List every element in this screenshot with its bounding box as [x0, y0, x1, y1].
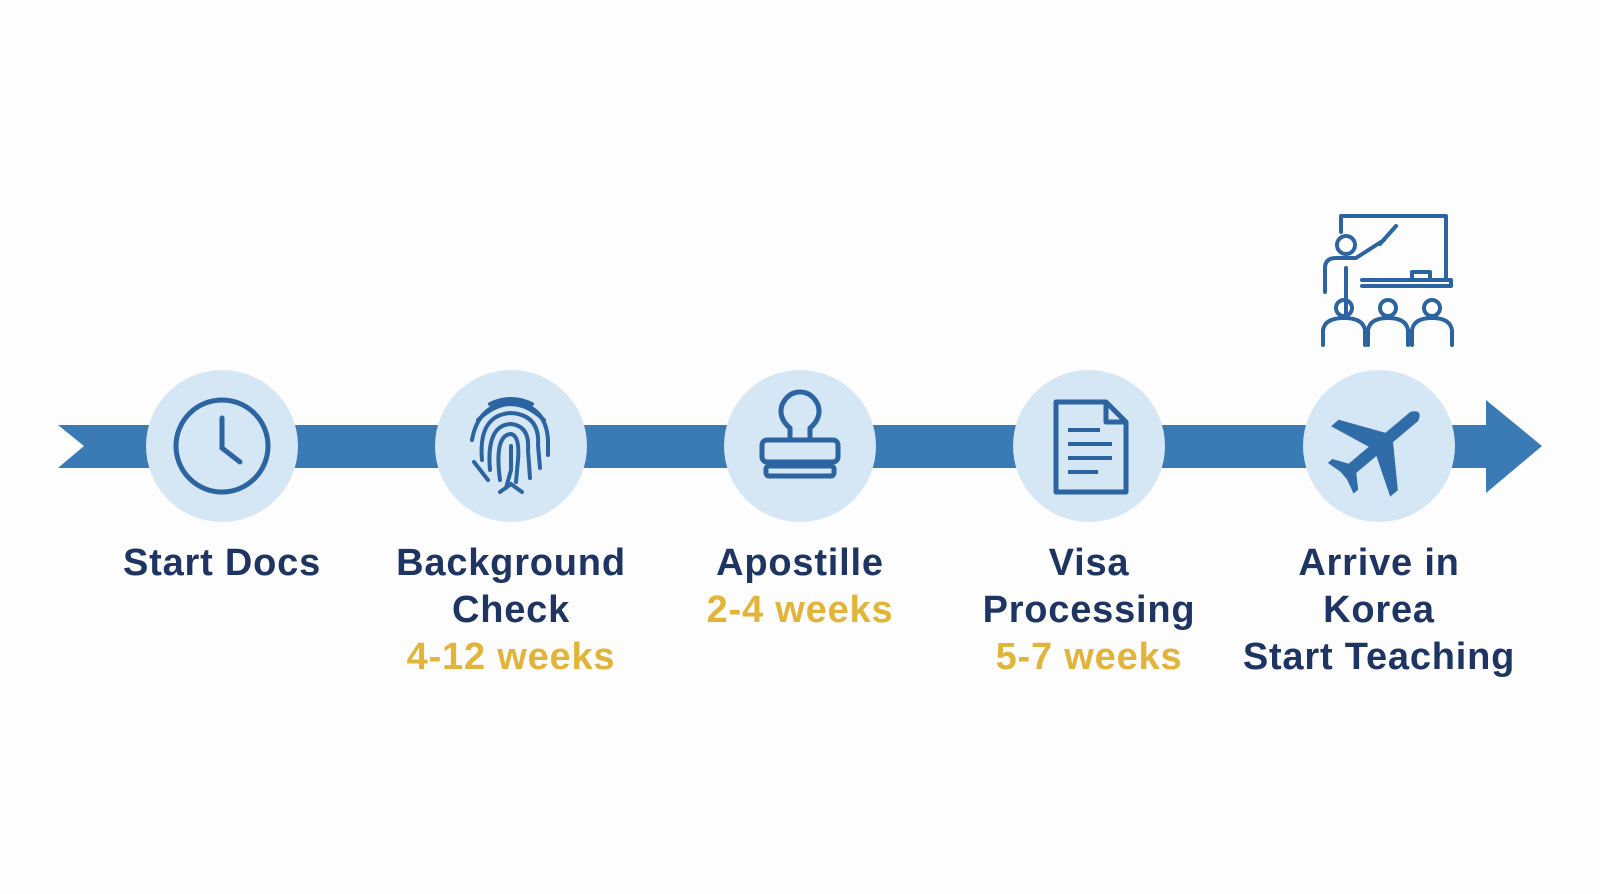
- label: Background Check: Check: [452, 589, 570, 631]
- step 3 icon: stamp: [724, 370, 876, 522]
- label: Apostille: Apostille: [716, 542, 884, 584]
- label: Arrive in Korea: [1243, 542, 1515, 678]
- label: Start Docs: Start Docs: [123, 542, 321, 584]
- label: Arrive in Korea: Start Teaching: [1243, 636, 1515, 678]
- step 1 icon: clock: [146, 370, 298, 522]
- step 5 icon: airplane: [1303, 370, 1455, 522]
- label: Visa Processing: Processing: [983, 589, 1195, 631]
- label: Background Check: [396, 542, 626, 678]
- icon: teacher at whiteboard: [1323, 216, 1452, 345]
- label: Background Check: Background: [396, 542, 626, 584]
- label: Apostille: [707, 542, 893, 631]
- label: Arrive in Korea: Arrive in: [1298, 542, 1460, 584]
- label: Visa Processing: Visa: [1049, 542, 1129, 584]
- step 2 icon: fingerprint: [435, 370, 587, 522]
- step 4 icon: document: [1013, 370, 1165, 522]
- label: Background Check: 4-12 weeks: [407, 636, 615, 678]
- label: Apostille: 2-4 weeks: [707, 589, 893, 631]
- label: Arrive in Korea: Korea: [1323, 589, 1435, 631]
- label: Visa Processing: [983, 542, 1195, 678]
- label: Visa Processing: 5-7 weeks: [996, 636, 1182, 678]
- arrow band: [58, 400, 1542, 493]
